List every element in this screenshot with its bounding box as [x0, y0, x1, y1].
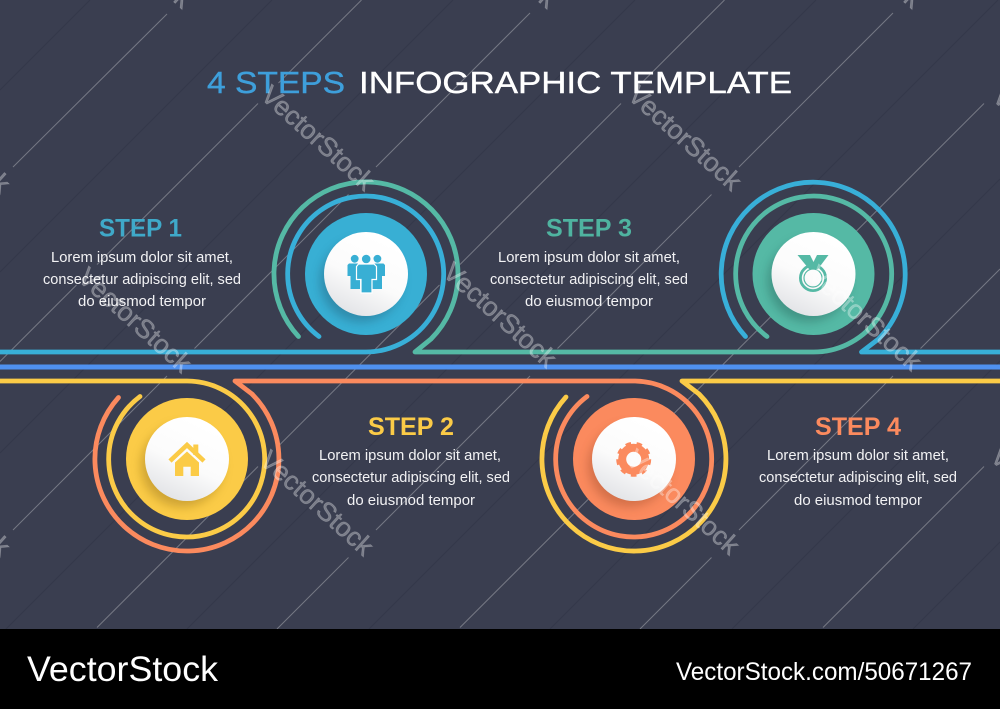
green line linking steps 1 and 3 [274, 182, 892, 352]
watermark repeated across the page: VectorStock [437, 257, 563, 374]
title: INFOGRAPHIC TEMPLATE [359, 65, 792, 100]
text block: step 3: do eiusmod tempor [525, 294, 653, 310]
text block: step 4 [759, 413, 957, 509]
text block: step 1: do eiusmod tempor [78, 294, 206, 310]
watermark repeated across the page: V [437, 626, 470, 660]
footer bar [0, 629, 1000, 709]
icon: people [348, 255, 385, 293]
watermark repeated across the page: VectorStock [622, 80, 748, 197]
step 4 line: yellow arc and tail [542, 381, 1000, 551]
text block: step 3: consectetur adipiscing elit, sed [490, 272, 688, 288]
text block: step 4: do eiusmod tempor [794, 493, 922, 509]
text block: step 2 [312, 413, 510, 509]
title [207, 65, 792, 100]
text block: step 2: STEP 2 [368, 413, 454, 441]
text block: step 1: STEP 1 [99, 214, 182, 242]
text block: step 1: consectetur adipiscing elit, sed [43, 272, 241, 288]
icon: gear [618, 444, 649, 475]
step 3 badge [752, 213, 874, 335]
watermark repeated across the page: VectorStock [254, 445, 380, 562]
step 3 line: blue arc and tail [721, 182, 1000, 352]
watermark repeated across the page: VectorStock [255, 80, 381, 197]
footer image id: VectorStock.com/50671267 [676, 658, 972, 686]
step 1 badge [305, 213, 427, 335]
step 1 line: blue arc [0, 196, 444, 352]
text block: step 2: do eiusmod tempor [347, 493, 475, 509]
watermark repeated across the page: VectorStock [802, 260, 928, 377]
text block: step 4: Lorem ipsum dolor sit amet, [767, 448, 949, 464]
footer brand: VectorStock [27, 650, 219, 689]
step 2 badge [126, 398, 248, 520]
step 2 line: yellow arc [0, 381, 265, 537]
step 4 badge [573, 398, 695, 520]
title: 4 STEPS [207, 65, 345, 100]
text block: step 3: STEP 3 [546, 214, 632, 242]
text block: step 4: consectetur adipiscing elit, sed [759, 470, 957, 486]
watermark repeated across the page: V [802, 626, 835, 660]
text block: step 3 [490, 214, 688, 310]
text block: step 1: Lorem ipsum dolor sit amet, [51, 250, 233, 266]
text block: step 2: Lorem ipsum dolor sit amet, [319, 448, 501, 464]
icon: house [170, 444, 204, 476]
text block: step 1 [43, 214, 241, 310]
watermark repeated across the page: VectorStock [72, 262, 198, 379]
icon: medal [798, 255, 828, 291]
text block: step 2: consectetur adipiscing elit, sed [312, 470, 510, 486]
text block: step 3: Lorem ipsum dolor sit amet, [498, 250, 680, 266]
centre timeline line [0, 364, 1000, 370]
orange line linking steps 2 and 4 [95, 381, 712, 551]
text block: step 4: STEP 4 [815, 413, 901, 441]
watermark repeated across the page: V [72, 626, 105, 660]
watermark repeated across the page: VectorStock [620, 444, 746, 561]
